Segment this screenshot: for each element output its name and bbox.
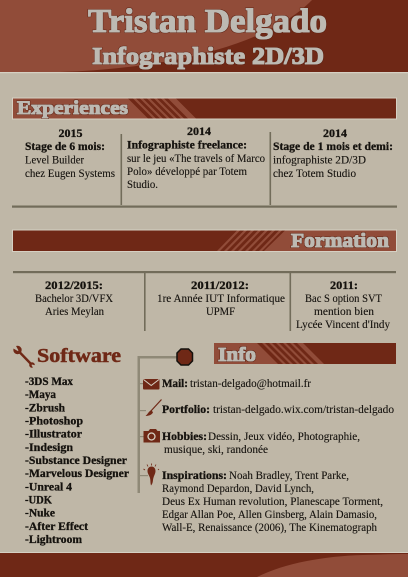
experience 2015: Stage de 6 mois: [25, 139, 105, 153]
software list: -Nuke [25, 506, 56, 520]
title: Tristan Delgado [88, 3, 327, 40]
software list: -Illustrator [25, 426, 83, 440]
icon: paint brush [146, 400, 162, 416]
inspirations text: Inspirations: [162, 468, 227, 482]
experience 2014 freelance [127, 124, 265, 191]
inspirations text: Wall-E, Renaissance (2006), The Kinematograph [162, 520, 377, 534]
formation 2012/2015 [35, 278, 113, 318]
heading bar: Info [214, 343, 396, 366]
software list: -Photoshop [25, 414, 83, 428]
panel: formation [13, 271, 396, 331]
experience 2014 stage: 2014 [323, 126, 347, 140]
software list: -Indesign [25, 440, 73, 454]
experience 2014 freelance: Infographiste freelance: [127, 138, 247, 152]
subtitle: Infographiste 2D/3D [92, 44, 324, 70]
heading bar: Info: Info [218, 344, 256, 366]
icon: wrench [12, 345, 36, 369]
software list: -Lightroom [25, 532, 82, 546]
icon: mail [143, 379, 160, 390]
experience 2014 stage: infographiste 2D/3D [273, 152, 366, 166]
portfolio text: Portfolio: [162, 402, 210, 416]
formation 2012/2015: Aries Meylan [45, 304, 104, 318]
hobbies text: Dessin, Jeux vidéo, Photographie, [208, 429, 360, 443]
experience 2014 freelance: sur le jeu «The travels of Marco [127, 151, 265, 165]
hobbies text [162, 429, 360, 456]
mail text: Mail: [162, 376, 188, 390]
software list: -3DS Max [25, 374, 73, 388]
timeline connector [138, 349, 192, 493]
heading bar: Formation: Formation [291, 230, 389, 252]
hobbies text: musique, ski, randonée [164, 442, 268, 456]
formation 2011/2012 [157, 278, 285, 318]
formation 2011/2012: 2011/2012: [191, 278, 249, 292]
formation 2011: Bac S option SVT [305, 291, 383, 305]
software list: -Marvelous Designer [25, 466, 130, 480]
experience 2014 stage: chez Totem Studio [273, 166, 356, 180]
icon: camera [144, 429, 160, 442]
formation 2011/2012: UPMF [206, 304, 235, 318]
mail text: tristan-delgado@hotmail.fr [190, 376, 311, 390]
panel: experiences [12, 124, 397, 208]
experience 2014 freelance: 2014 [187, 124, 211, 138]
software list: -After Effect [25, 519, 88, 533]
formation 2012/2015: Bachelor 3D/VFX [35, 291, 113, 305]
portfolio text: tristan-delgado.wix.com/tristan-delgado [213, 402, 394, 416]
inspirations text [162, 468, 383, 534]
inspirations text: Raymond Depardon, David Lynch, [162, 481, 314, 495]
experience 2015: chez Eugen Systems [25, 166, 115, 180]
software list: -Zbrush [25, 400, 65, 414]
hobbies text: Hobbies: [162, 429, 207, 443]
formation 2011 [296, 278, 390, 331]
experience 2014 stage: Stage de 1 mois et demi: [273, 139, 393, 153]
inspirations text: Noah Bradley, Trent Parke, [229, 468, 349, 482]
heading: Software: Software [37, 345, 121, 367]
header banner [0, 0, 408, 73]
software list: -Unreal 4 [25, 479, 72, 493]
timeline node [177, 349, 192, 365]
footer banner [0, 552, 408, 577]
experience 2015 [25, 126, 115, 180]
formation 2011: Lycée Vincent d'Indy [296, 317, 390, 331]
formation 2011: mention bien [314, 304, 374, 318]
software list: -Substance Designer [25, 453, 128, 467]
formation 2011: 2011: [330, 278, 358, 292]
experience 2015: 2015 [58, 126, 82, 140]
experience 2014 freelance: Studio. [127, 177, 158, 191]
experience 2015: Level Builder [25, 152, 84, 166]
inspirations text: Edgar Allan Poe, Allen Ginsberg, Alain Damasio, [162, 507, 377, 521]
heading bar: Experiences: Experiences [17, 98, 128, 119]
software list: -Maya [25, 387, 56, 401]
inspirations text: Deus Ex Human revolution, Planescape Torment, [162, 494, 383, 508]
icon: light bulb [144, 464, 159, 486]
software list: -UDK [25, 492, 53, 506]
formation 2011/2012: 1re Année IUT Informatique [157, 291, 285, 305]
experience 2014 freelance: Polo» développé par Totem [127, 164, 248, 178]
formation 2012/2015: 2012/2015: [45, 278, 103, 292]
heading bar: Experiences [12, 98, 397, 120]
software list [25, 374, 130, 546]
experience 2014 stage [273, 126, 393, 180]
heading bar: Formation [12, 230, 397, 252]
